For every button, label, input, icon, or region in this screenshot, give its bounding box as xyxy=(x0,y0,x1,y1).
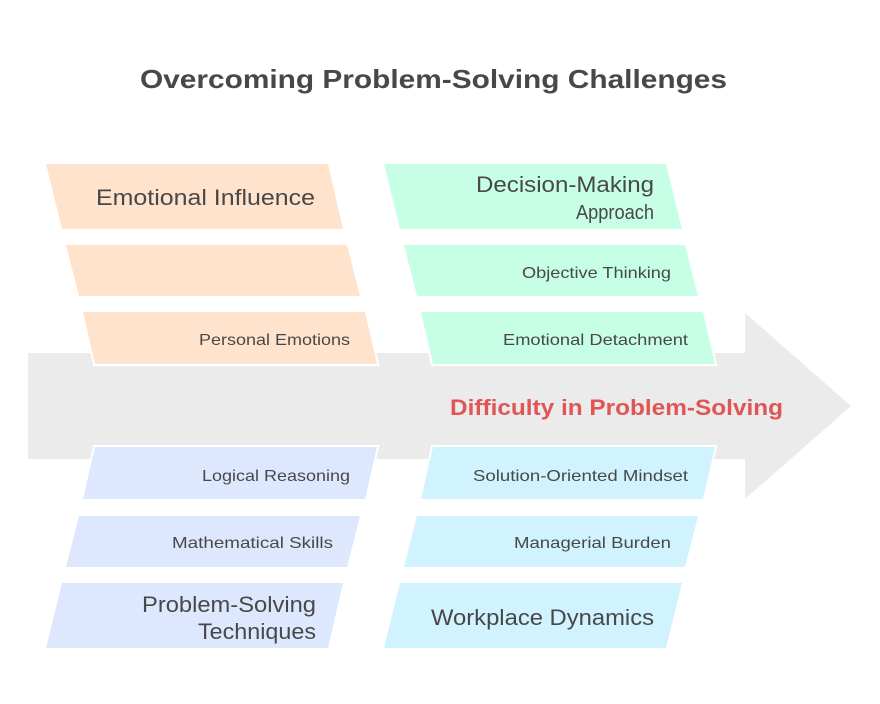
heading: workplace dynamics xyxy=(384,583,682,648)
item: solution-oriented mindset xyxy=(421,447,715,499)
panel: decision-making approach xyxy=(384,164,715,364)
item: logical reasoning xyxy=(83,447,377,499)
heading: decision-making approach: Approach xyxy=(576,202,654,224)
item: personal emotions xyxy=(83,312,377,364)
item: solution-oriented mindset: Solution-Oriented Mindset xyxy=(473,468,689,485)
heading: workplace dynamics: Workplace Dynamics xyxy=(431,605,654,630)
item: managerial burden: Managerial Burden xyxy=(514,535,671,552)
item: mathematical skills xyxy=(66,516,360,567)
title: Overcoming Problem-Solving Challenges xyxy=(140,64,727,94)
item: objective thinking xyxy=(404,245,698,296)
item: mathematical skills: Mathematical Skills xyxy=(172,535,333,552)
heading: emotional influence: Emotional Influence xyxy=(96,185,315,210)
panel: problem-solving techniques xyxy=(46,447,377,648)
empty bar xyxy=(66,245,360,296)
panel: workplace dynamics xyxy=(384,447,715,648)
arrow label: Difficulty in Problem-Solving xyxy=(450,395,783,420)
item: personal emotions: Personal Emotions xyxy=(199,332,350,349)
heading: emotional influence xyxy=(46,164,343,229)
heading: problem-solving techniques: Techniques xyxy=(198,619,316,644)
item: objective thinking: Objective Thinking xyxy=(522,265,671,282)
item: logical reasoning: Logical Reasoning xyxy=(202,468,350,485)
item: emotional detachment: Emotional Detachment xyxy=(503,332,689,349)
heading: problem-solving techniques: Problem-Solving xyxy=(142,592,316,617)
central arrow xyxy=(28,313,851,499)
heading: decision-making approach xyxy=(384,164,682,229)
heading: decision-making approach: Decision-Making xyxy=(476,172,654,197)
heading: problem-solving techniques xyxy=(46,583,343,648)
item: managerial burden xyxy=(404,516,698,567)
panel: emotional influence xyxy=(46,164,377,364)
item: emotional detachment xyxy=(421,312,715,364)
